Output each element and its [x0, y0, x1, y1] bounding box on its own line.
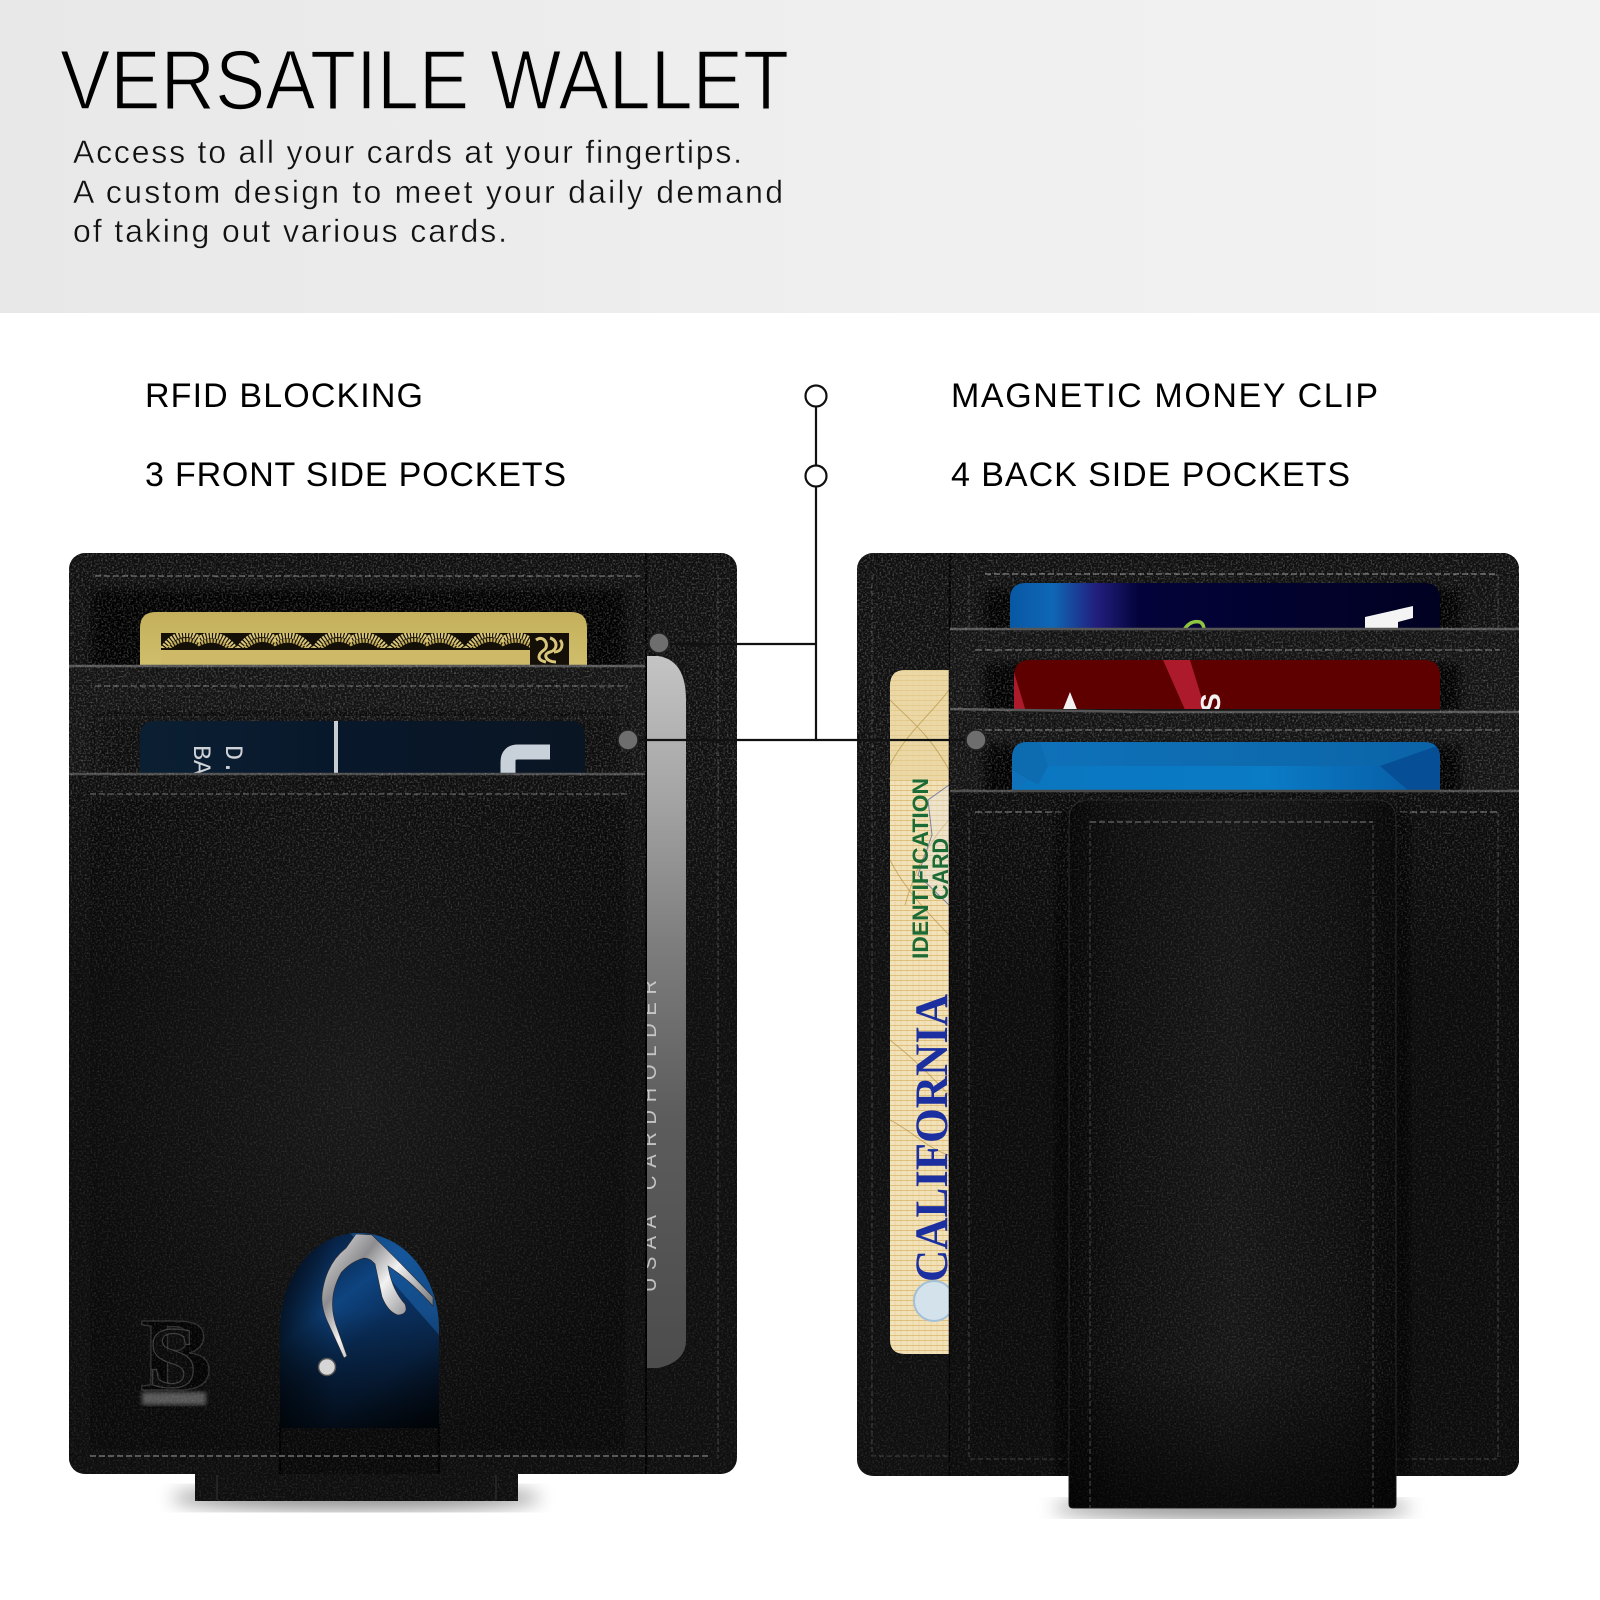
blue card in pocket 1 — [1010, 583, 1440, 630]
ID card: CALIFORNIA — [906, 994, 958, 1282]
header banner — [0, 0, 1600, 313]
back wallet — [850, 553, 1530, 1508]
feature labels: right column — [951, 377, 1378, 494]
embossed SB monogram: B — [140, 1296, 212, 1413]
feature labels: left column — [145, 377, 566, 494]
marker: RFID blocking / money clip — [806, 386, 826, 406]
lower main layer — [950, 791, 1519, 1476]
marker: front / back pockets — [806, 466, 826, 486]
magnetic money clip — [1069, 800, 1396, 1508]
bottom stitching — [90, 1455, 710, 1457]
gold card — [140, 612, 587, 665]
pocket 1 recess — [986, 590, 1460, 628]
front wallet — [60, 553, 750, 1501]
vertical fold — [949, 553, 951, 1476]
metal card in side pocket: CARDHOLDER — [639, 980, 661, 1190]
wallet body group — [850, 553, 1530, 1476]
red card in pocket 2: S — [1195, 693, 1226, 712]
thumb cutout strip — [280, 1424, 439, 1474]
anchor dots on wallets — [618, 633, 986, 750]
icon: silver antler logo — [322, 1234, 433, 1358]
upper pocket recess — [93, 591, 624, 664]
leather grain overlay — [60, 553, 750, 1474]
pocket 2 layer — [950, 629, 1519, 718]
wallet leather body — [69, 553, 737, 1474]
wallet body group — [60, 553, 750, 1474]
feature labels: right column: 4 BACK SIDE POCKETS — [951, 456, 1350, 494]
embossed SB monogram: S — [148, 1310, 197, 1407]
middle pocket layer — [69, 664, 645, 687]
ID card — [890, 670, 949, 1354]
back pocket area — [1504, 553, 1519, 1476]
dark blue card — [140, 721, 585, 775]
subtitle text block: of taking out various cards. — [73, 213, 507, 249]
wallet leather body — [857, 553, 1519, 1476]
red card in pocket 2 — [1014, 660, 1440, 712]
subtitle text block: A custom design to meet your daily demand — [73, 174, 783, 210]
top seam stitching — [985, 573, 1498, 575]
ID card: IDENTIFICATION — [908, 778, 933, 959]
dark blue card: D. — [218, 745, 247, 775]
dark blue card: BA — [186, 745, 215, 775]
leather grain overlay — [850, 553, 1530, 1476]
feature labels: right column: MAGNETIC MONEY CLIP — [951, 377, 1378, 415]
top seam stitching — [95, 575, 640, 577]
feature labels: left column: 3 FRONT SIDE POCKETS — [145, 456, 566, 494]
clip shadow on wallet — [1055, 810, 1410, 1476]
blue thumb-slot card with silver logo — [280, 1233, 439, 1428]
left side stitching — [872, 575, 950, 1456]
soft floor shadows — [171, 1486, 1412, 1517]
subtitle text block — [73, 134, 783, 249]
side strip stitching — [717, 575, 719, 1458]
blue card in pocket 3 — [1012, 742, 1440, 792]
ID card: CARD — [928, 838, 953, 900]
money clip peeking under front wallet — [195, 1465, 518, 1501]
connector lines with callout markers — [618, 386, 986, 750]
pocket 3 layer — [950, 709, 1519, 800]
metal card in side pocket — [647, 656, 686, 1368]
front pocket panel — [69, 553, 646, 1474]
title: VERSATILE WALLET — [60, 33, 789, 127]
icon: silver dot — [318, 1358, 336, 1376]
subtitle text block: Access to all your cards at your fingertips. — [73, 134, 742, 170]
feature labels: left column: RFID BLOCKING — [145, 377, 423, 415]
metal card in side pocket: USAA — [639, 1214, 661, 1292]
